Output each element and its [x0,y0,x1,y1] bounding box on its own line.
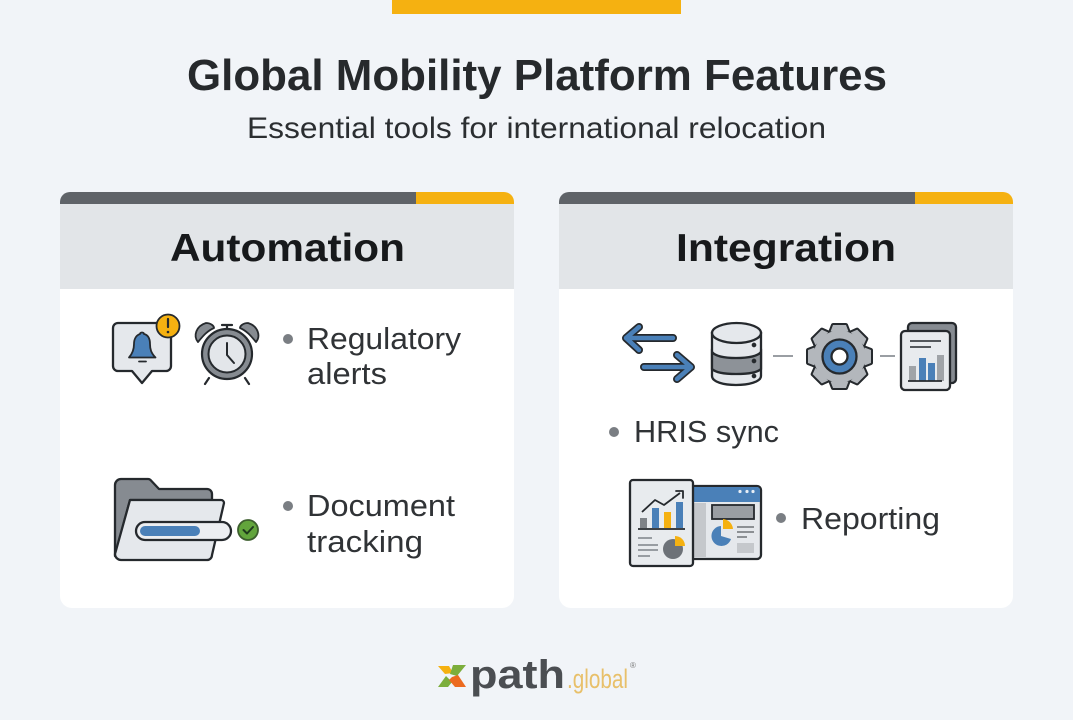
logo mark [438,665,466,687]
icon: database [712,323,761,385]
icon: sync arrows [626,327,691,379]
icon: gear [808,325,871,388]
panel: integration [559,192,1013,608]
bullet: hris sync: HRIS sync [634,414,779,449]
bullet: document tracking [283,488,455,559]
bullet: reporting: Reporting [801,501,940,536]
subtitle: Essential tools for international relocation [247,112,826,145]
panel: automation [60,192,514,608]
icon: printed report [630,480,693,566]
bullet: regulatory alerts [283,321,462,391]
panel header band [60,204,514,289]
icon: document folder with progress bar [115,479,258,560]
panel header band [559,204,1013,289]
heading: automation: Automation [170,227,405,270]
connector line [880,355,895,357]
icon: alarm clock [196,323,258,384]
icon: dashboard window [688,486,761,559]
logo wordmark: path [470,653,565,697]
panel top stripe [559,192,1013,204]
logo: xpath.global [438,653,636,697]
logo registered mark: ® [630,661,636,670]
bullet: document tracking: Document [307,488,455,523]
bullet: document tracking: tracking [307,524,423,559]
icon: notification bell [113,314,180,383]
panel top stripe [60,192,514,204]
icon: report pages [901,323,956,390]
connector line [773,355,793,357]
top accent bar [392,0,681,14]
heading: integration: Integration [676,227,896,270]
bullet: regulatory alerts: Regulatory [307,321,462,356]
title: Global Mobility Platform Features [187,51,887,100]
logo suffix: .global [567,664,628,694]
bullet: regulatory alerts: alerts [307,356,387,391]
